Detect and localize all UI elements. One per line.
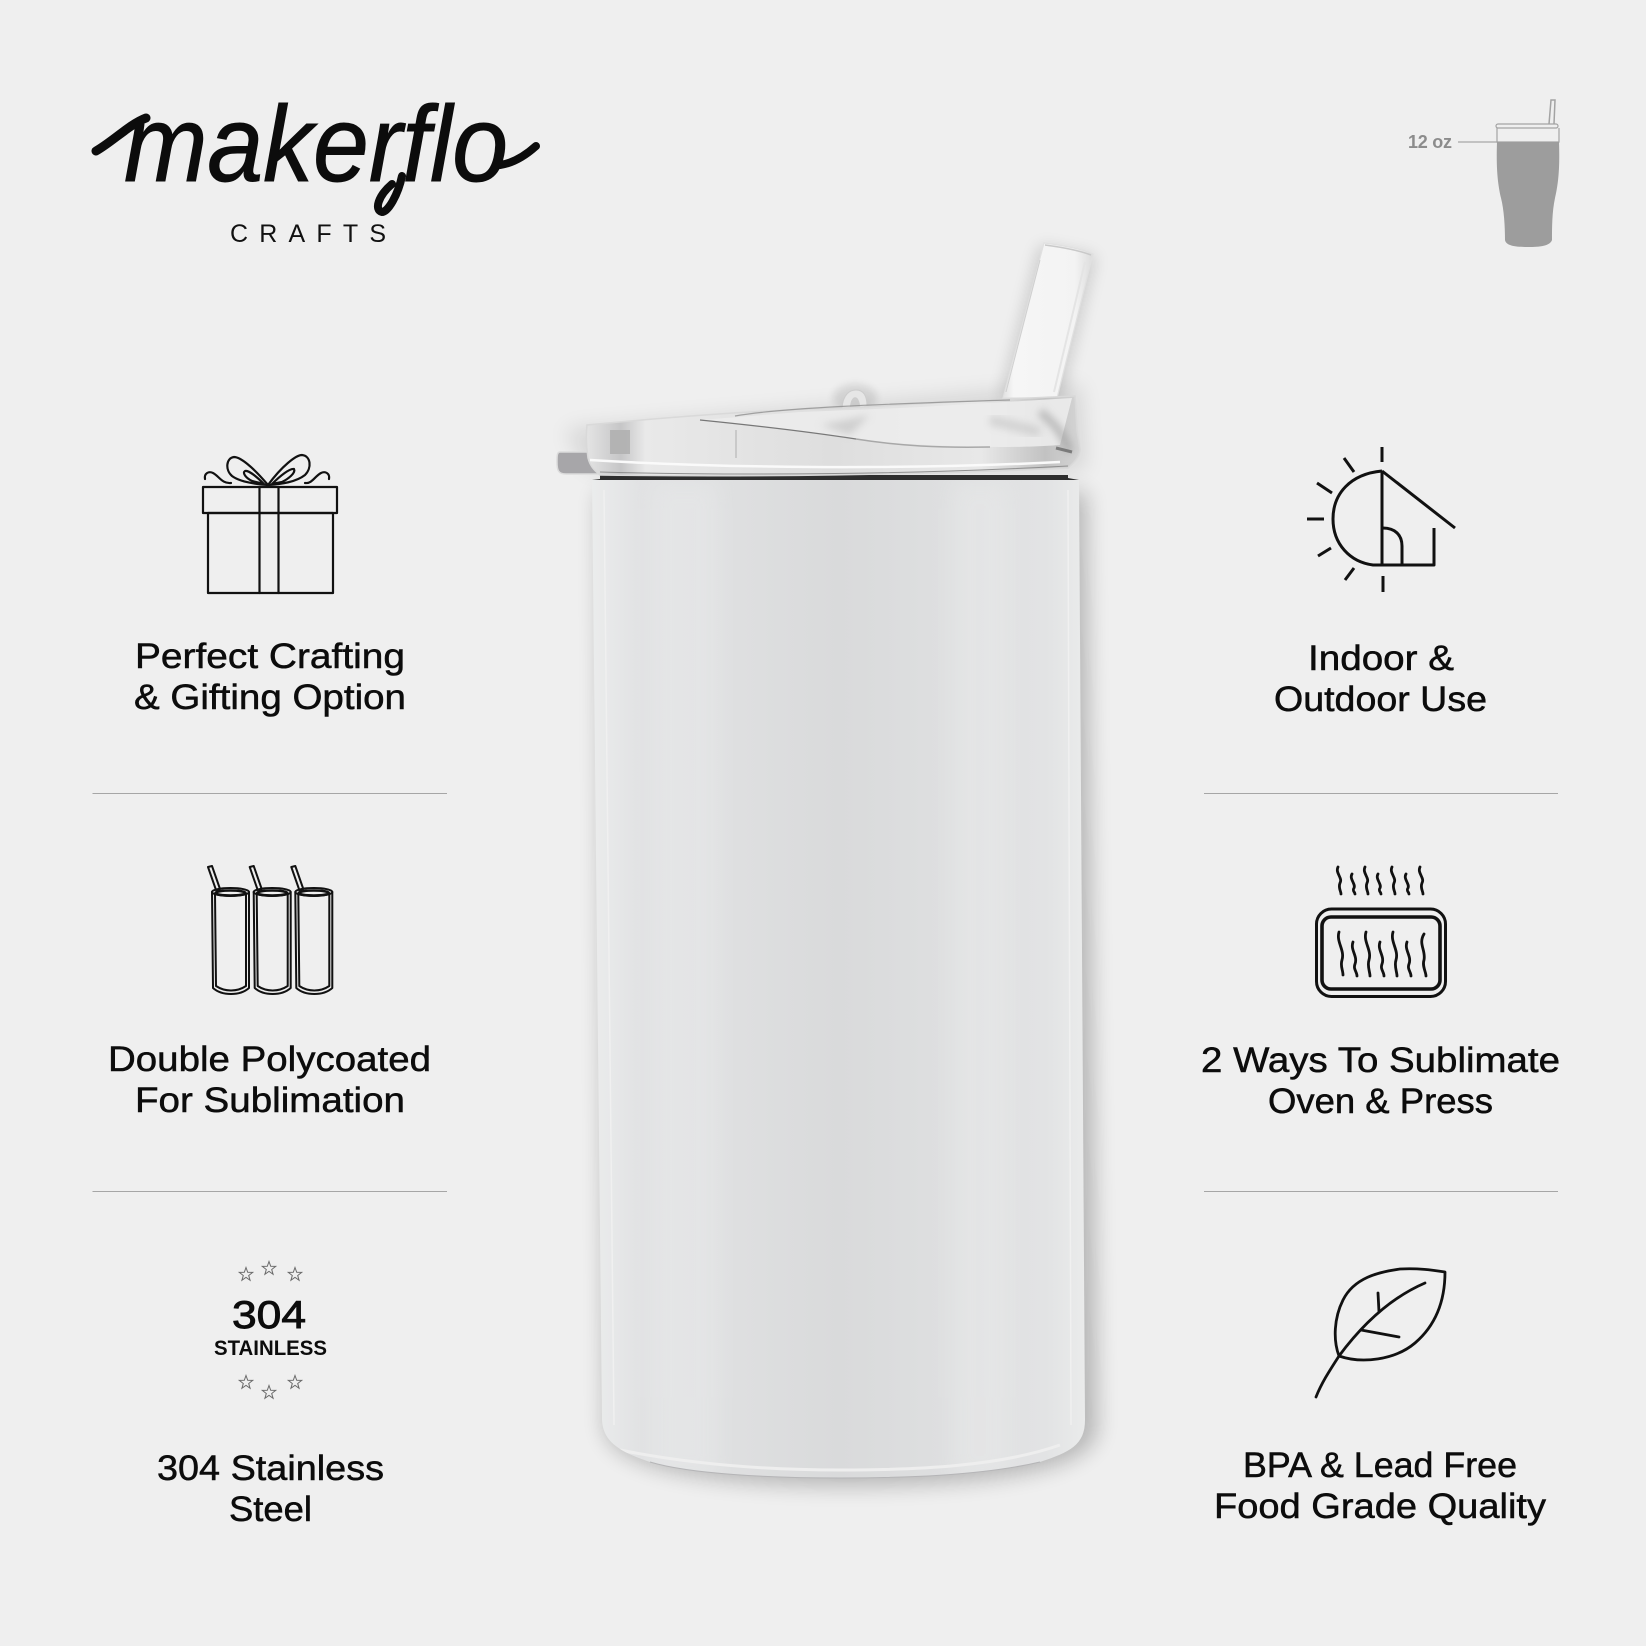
tumbler three: [291, 866, 332, 994]
icon: 304 stainless badge: [214, 1262, 327, 1398]
tumbler product image: [557, 243, 1097, 1486]
capacity leader line: [1458, 141, 1498, 143]
clear lid: [586, 396, 1080, 476]
divider: [1204, 1190, 1558, 1192]
feature text: 2 Ways To Sublimate: [1201, 1041, 1560, 1080]
feature text: Double Polycoated: [108, 1040, 431, 1079]
steam above: [1337, 867, 1423, 894]
panel: two ways to sublimate: [1201, 867, 1560, 1121]
capacity diagram: 12 oz: [1408, 100, 1559, 247]
tumbler neck band: [592, 475, 1079, 480]
icon: gift box: [203, 455, 337, 593]
icon: three tumblers: [208, 866, 332, 994]
feature text: BPA & Lead Free: [1243, 1446, 1517, 1485]
icon: oven with heat waves: [1316, 867, 1446, 996]
feature text: Food Grade Quality: [1214, 1487, 1547, 1526]
mini tumbler: [1496, 100, 1559, 247]
feature text: Steel: [229, 1490, 312, 1529]
panel: indoor and outdoor: [1274, 447, 1487, 719]
icon: leaf: [1316, 1269, 1445, 1397]
feature text: For Sublimation: [135, 1081, 405, 1120]
tumbler two: [250, 866, 291, 994]
logo subtitle: CRAFTS: [230, 220, 386, 248]
divider: [92, 792, 447, 794]
panel: 304 stainless steel: [157, 1262, 384, 1529]
capacity label: 12 oz: [1408, 132, 1452, 152]
tumbler shadow: [565, 245, 1097, 1486]
tumbler one: [208, 866, 249, 994]
stars: [239, 1262, 302, 1398]
tumbler body: [592, 480, 1085, 1480]
badge word: STAINLESS: [214, 1337, 327, 1360]
panel: double polycoated: [108, 866, 431, 1120]
lid grey tab: [557, 452, 600, 474]
badge number: 304: [232, 1294, 306, 1337]
feature text: [157, 1449, 384, 1529]
logo: makerflo crafts: [96, 83, 536, 248]
feature text: [1214, 1446, 1547, 1526]
feature text: Indoor &: [1308, 639, 1454, 678]
feature text: [134, 637, 406, 717]
panel: perfect crafting: [134, 455, 406, 717]
feature text: Outdoor Use: [1274, 680, 1487, 719]
panel: bpa and lead free: [1214, 1269, 1547, 1526]
feature text: 304 Stainless: [157, 1449, 384, 1488]
divider: [1204, 792, 1558, 794]
feature text: [1274, 639, 1487, 719]
steam inside: [1338, 932, 1426, 976]
logo wordmark: makerflo: [124, 83, 508, 204]
feature text: & Gifting Option: [134, 678, 406, 717]
icon: sun and house: [1307, 447, 1455, 592]
straw: [1003, 243, 1093, 398]
feature text: Oven & Press: [1268, 1082, 1493, 1121]
feature text: [1201, 1041, 1560, 1121]
feature text: Perfect Crafting: [135, 637, 405, 676]
feature text: [108, 1040, 431, 1120]
divider: [92, 1190, 447, 1192]
lid pull tab: [842, 390, 867, 408]
